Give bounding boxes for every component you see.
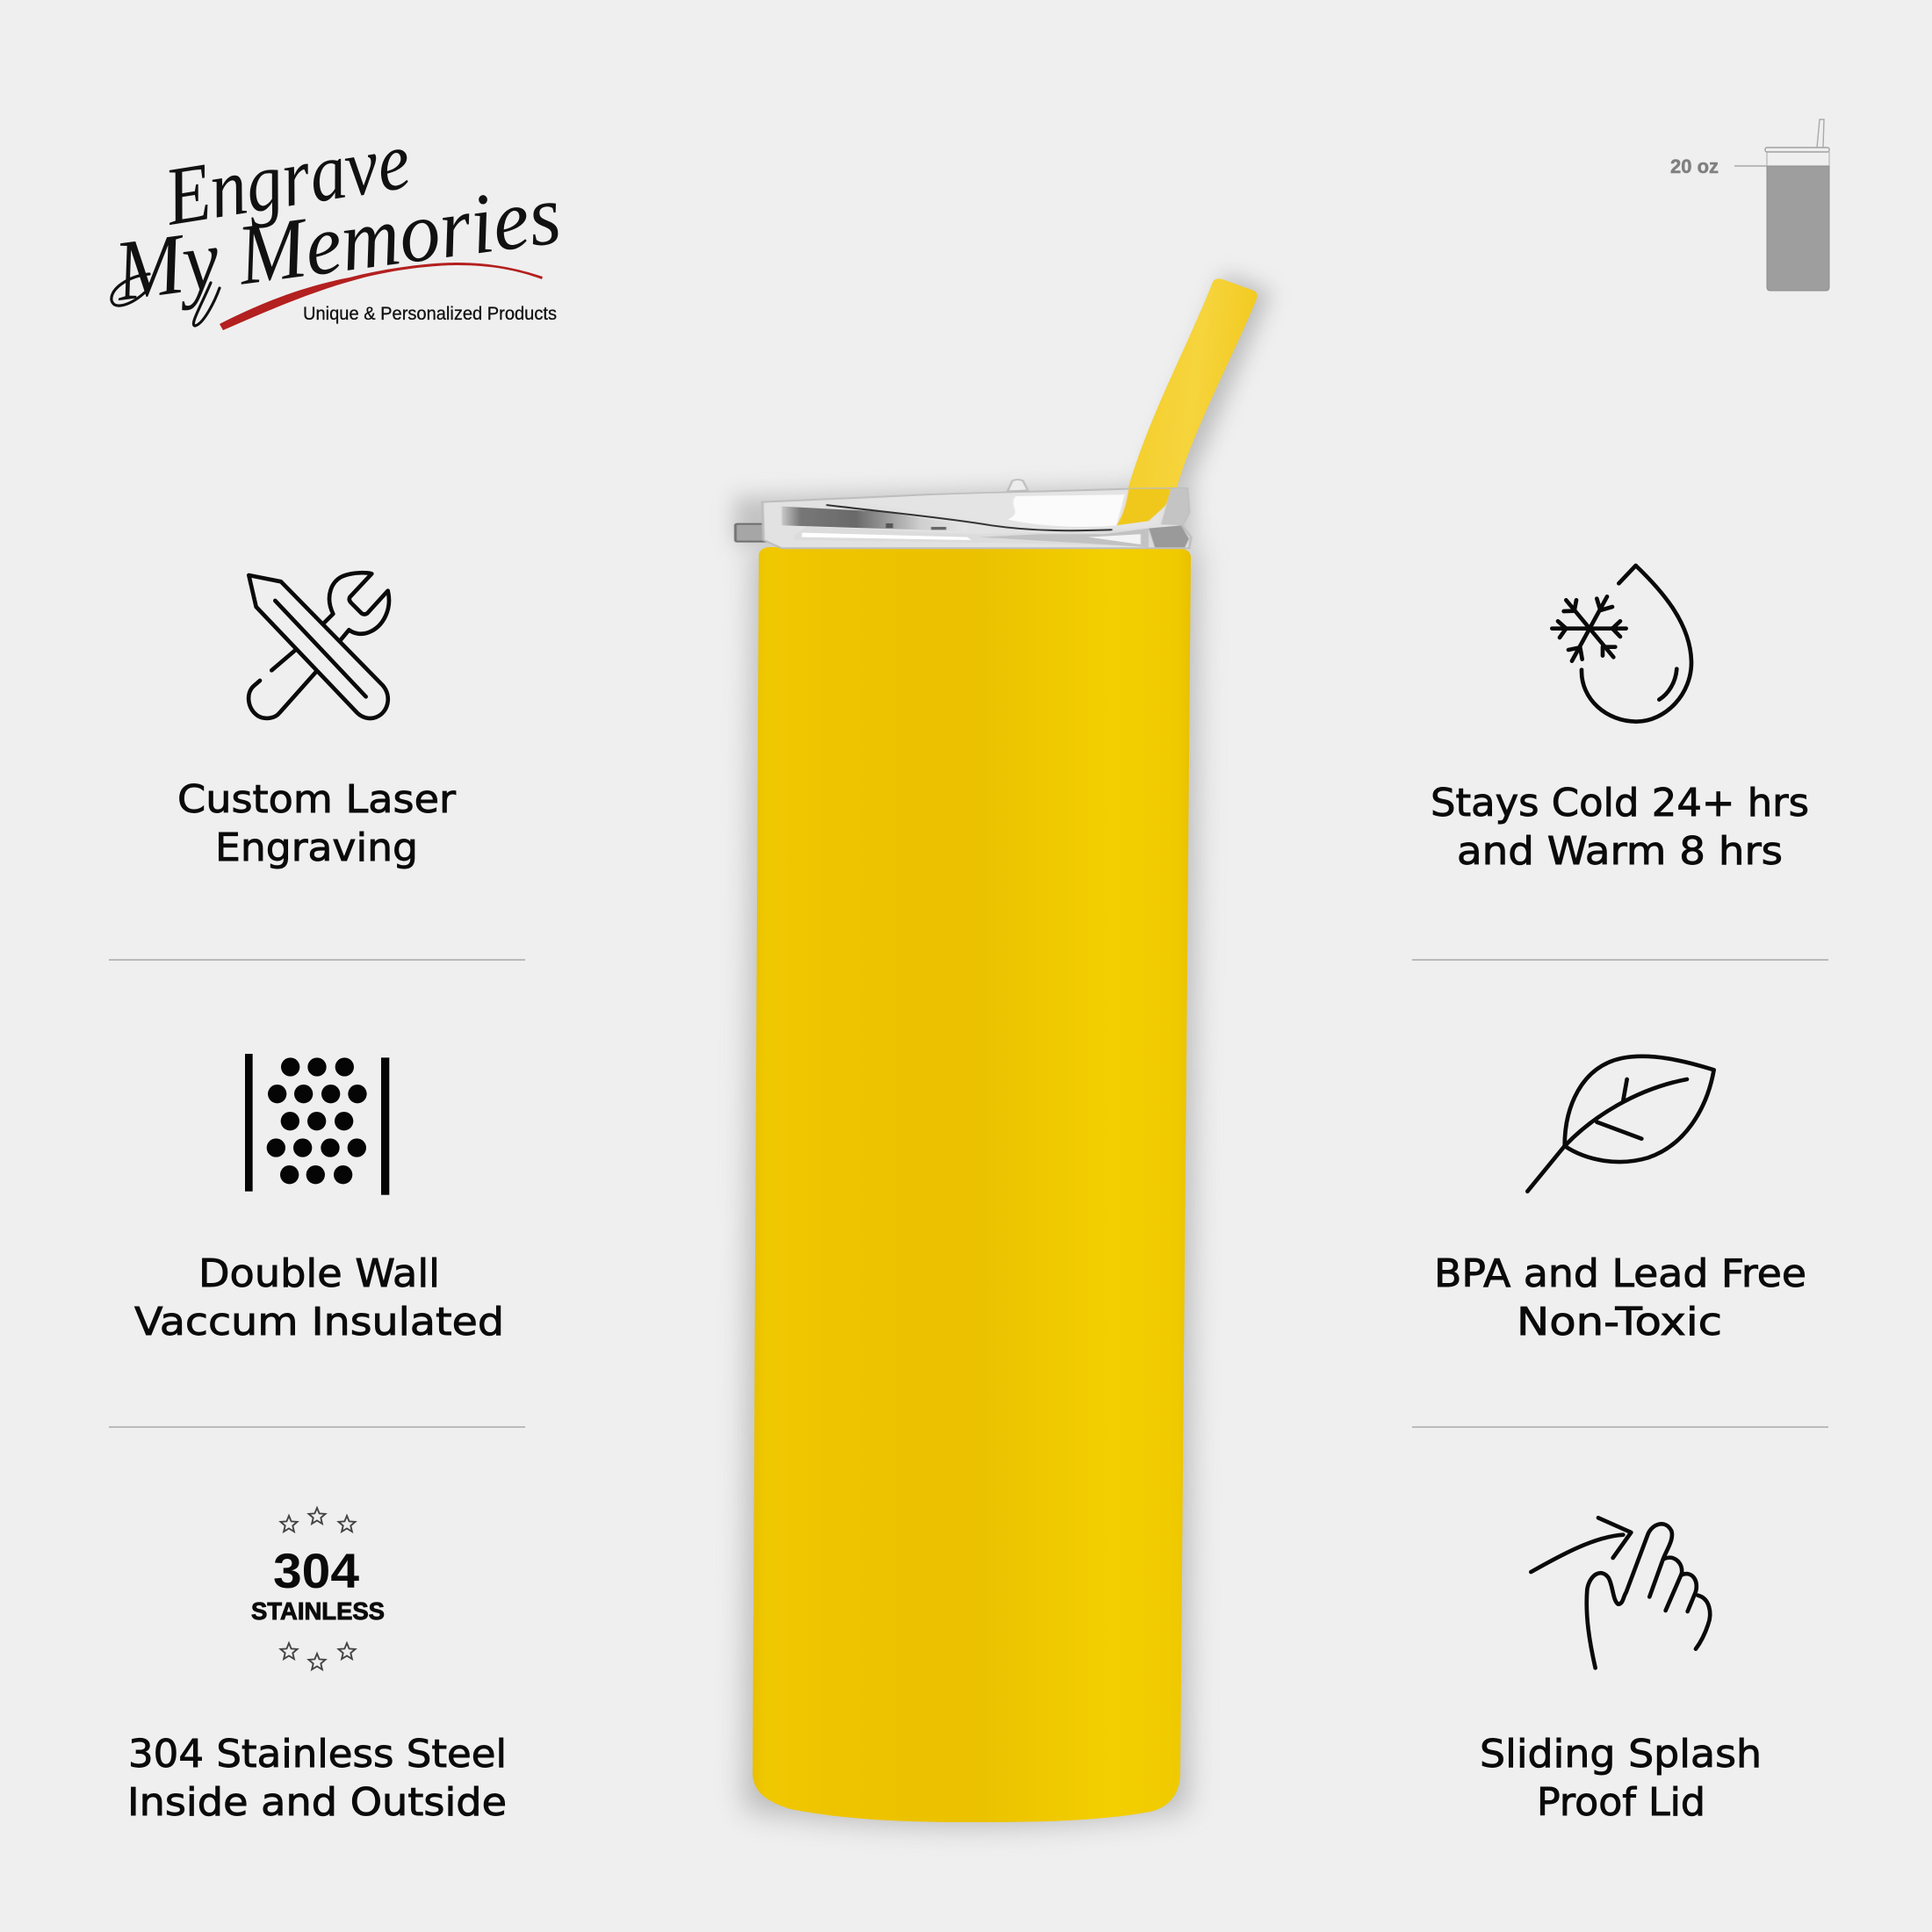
label: stays cold and warm: Stays Cold 24+ hrs xyxy=(1431,781,1809,825)
label: double wall vacuum insulated xyxy=(134,1251,504,1344)
label: sliding splash proof lid: Sliding Splash xyxy=(1480,1732,1762,1777)
capacity indicator: 20 oz xyxy=(1670,119,1829,291)
label: 304 stainless steel inside and outside xyxy=(127,1732,507,1825)
capacity indicator: 20 oz: 20 oz xyxy=(1670,155,1719,177)
logo: Engrave My Memories: My Memories xyxy=(108,167,566,320)
icon: 304 stainless badge: STAINLESS xyxy=(251,1597,385,1625)
tumbler shadow xyxy=(734,274,1272,1826)
icon: 304 stainless badge xyxy=(251,1508,385,1669)
label: BPA and lead free non-toxic xyxy=(1434,1251,1806,1344)
panel: 304 stainless steel xyxy=(127,1508,507,1825)
label: double wall vacuum insulated: Double Wall xyxy=(198,1251,440,1296)
logo swoosh xyxy=(220,263,543,330)
tumbler product image xyxy=(734,274,1272,1826)
lid tab xyxy=(735,524,768,542)
logo tagline: Unique & Personalized Products xyxy=(303,304,557,324)
icon: leaf xyxy=(1527,1056,1714,1192)
logo flourishes xyxy=(112,274,220,326)
straw xyxy=(1127,278,1258,494)
panel: custom laser engraving xyxy=(177,573,457,870)
panel: sliding splash proof lid xyxy=(1480,1517,1762,1825)
label: 304 stainless steel inside and outside: 304 Stainless Steel xyxy=(128,1732,507,1777)
icon: cold drop xyxy=(1552,566,1691,722)
label: custom laser engraving: Custom Laser xyxy=(177,777,457,822)
label: custom laser engraving xyxy=(177,777,457,870)
icon: 304 stainless badge: 304 xyxy=(273,1543,359,1598)
lid nub xyxy=(1007,479,1027,491)
label: BPA and lead free non-toxic: Non-Toxic xyxy=(1517,1300,1722,1344)
label: sliding splash proof lid: Proof Lid xyxy=(1537,1780,1705,1825)
lid lower band xyxy=(794,525,1189,547)
label: double wall vacuum insulated: Vaccum Insulated xyxy=(134,1300,504,1344)
label: sliding splash proof lid xyxy=(1480,1732,1762,1825)
lid dark band xyxy=(782,507,967,531)
logo: Engrave My Memories xyxy=(108,114,566,330)
logo: Engrave My Memories: Engrave xyxy=(157,114,416,243)
icon: insulation dots xyxy=(245,1054,389,1195)
icon: tools xyxy=(249,573,389,718)
label: stays cold and warm xyxy=(1431,781,1809,874)
lid xyxy=(735,479,1191,548)
panel: double wall insulation xyxy=(134,1054,504,1344)
label: 304 stainless steel inside and outside: Inside and Outside xyxy=(127,1780,507,1825)
label: custom laser engraving: Engraving xyxy=(215,825,418,870)
lid shell xyxy=(762,488,1191,548)
label: BPA and lead free non-toxic: BPA and Lead Free xyxy=(1434,1251,1806,1296)
panel: temperature retention xyxy=(1431,566,1809,874)
tumbler body xyxy=(753,547,1191,1822)
icon: swipe hand xyxy=(1531,1517,1710,1668)
label: stays cold and warm: and Warm 8 hrs xyxy=(1457,829,1783,874)
lid window xyxy=(854,492,1164,529)
panel: BPA and lead free xyxy=(1434,1056,1806,1344)
